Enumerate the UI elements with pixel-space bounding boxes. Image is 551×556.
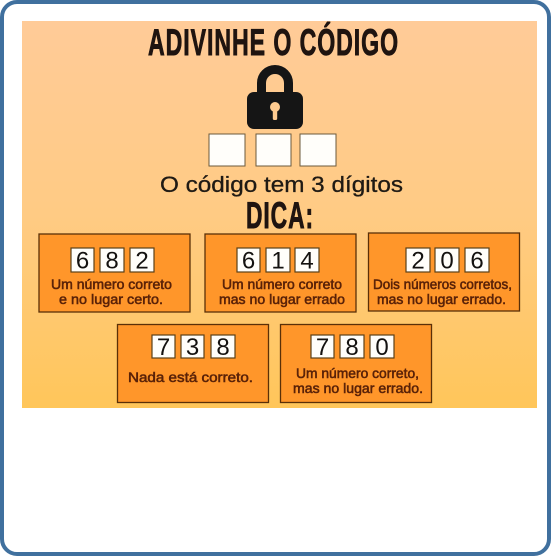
panel: clue 206: 6 xyxy=(470,248,484,274)
panel: clue 780: mas no lugar errado. xyxy=(293,380,423,396)
panel: clue 206 xyxy=(368,233,520,311)
panel: clue 682: Um número correto xyxy=(51,276,172,292)
panel: clue 738: 8 xyxy=(216,334,230,361)
panel: clue 206: 2 xyxy=(411,248,425,274)
panel: clue 614: 6 xyxy=(242,248,255,274)
icon: padlock xyxy=(247,70,303,129)
panel: clue 738: 7 xyxy=(157,334,170,361)
panel: clue 614: 4 xyxy=(300,248,314,274)
panel: clue 780 xyxy=(280,324,432,402)
panel: clue 614: mas no lugar errado xyxy=(219,291,345,307)
panel: clue 682: 8 xyxy=(105,248,119,274)
panel: clue 682: 6 xyxy=(76,248,89,274)
panel: clue 614: Um número correto xyxy=(222,276,342,292)
panel: clue 780: Um número correto, xyxy=(296,365,419,381)
panel: clue 206: mas no lugar errado. xyxy=(377,291,506,307)
panel: clue 682: e no lugar certo. xyxy=(59,291,163,307)
panel: clue 206: 0 xyxy=(440,248,454,274)
panel: clue 206: Dois números corretos, xyxy=(373,276,512,292)
panel: clue 738: 3 xyxy=(186,334,199,361)
panel: clue 780: 8 xyxy=(345,334,359,361)
panel: clue 682: 2 xyxy=(135,248,149,274)
panel: clue 780: 0 xyxy=(375,334,389,361)
panel: clue 738: Nada está correto. xyxy=(128,369,253,385)
panel: clue 738 xyxy=(118,324,268,402)
empty code boxes xyxy=(209,134,336,166)
panel: puzzle background xyxy=(22,21,537,408)
title: ADIVINHE O CÓDIGO xyxy=(148,21,399,63)
panel: clue 682 xyxy=(39,234,190,312)
panel: clue 614 xyxy=(205,234,356,312)
panel: clue 780: 7 xyxy=(316,334,329,361)
heading: hint: DICA: xyxy=(246,195,314,236)
panel: clue 614: 1 xyxy=(271,248,285,274)
subtitle: O código tem 3 dígitos xyxy=(160,172,403,197)
